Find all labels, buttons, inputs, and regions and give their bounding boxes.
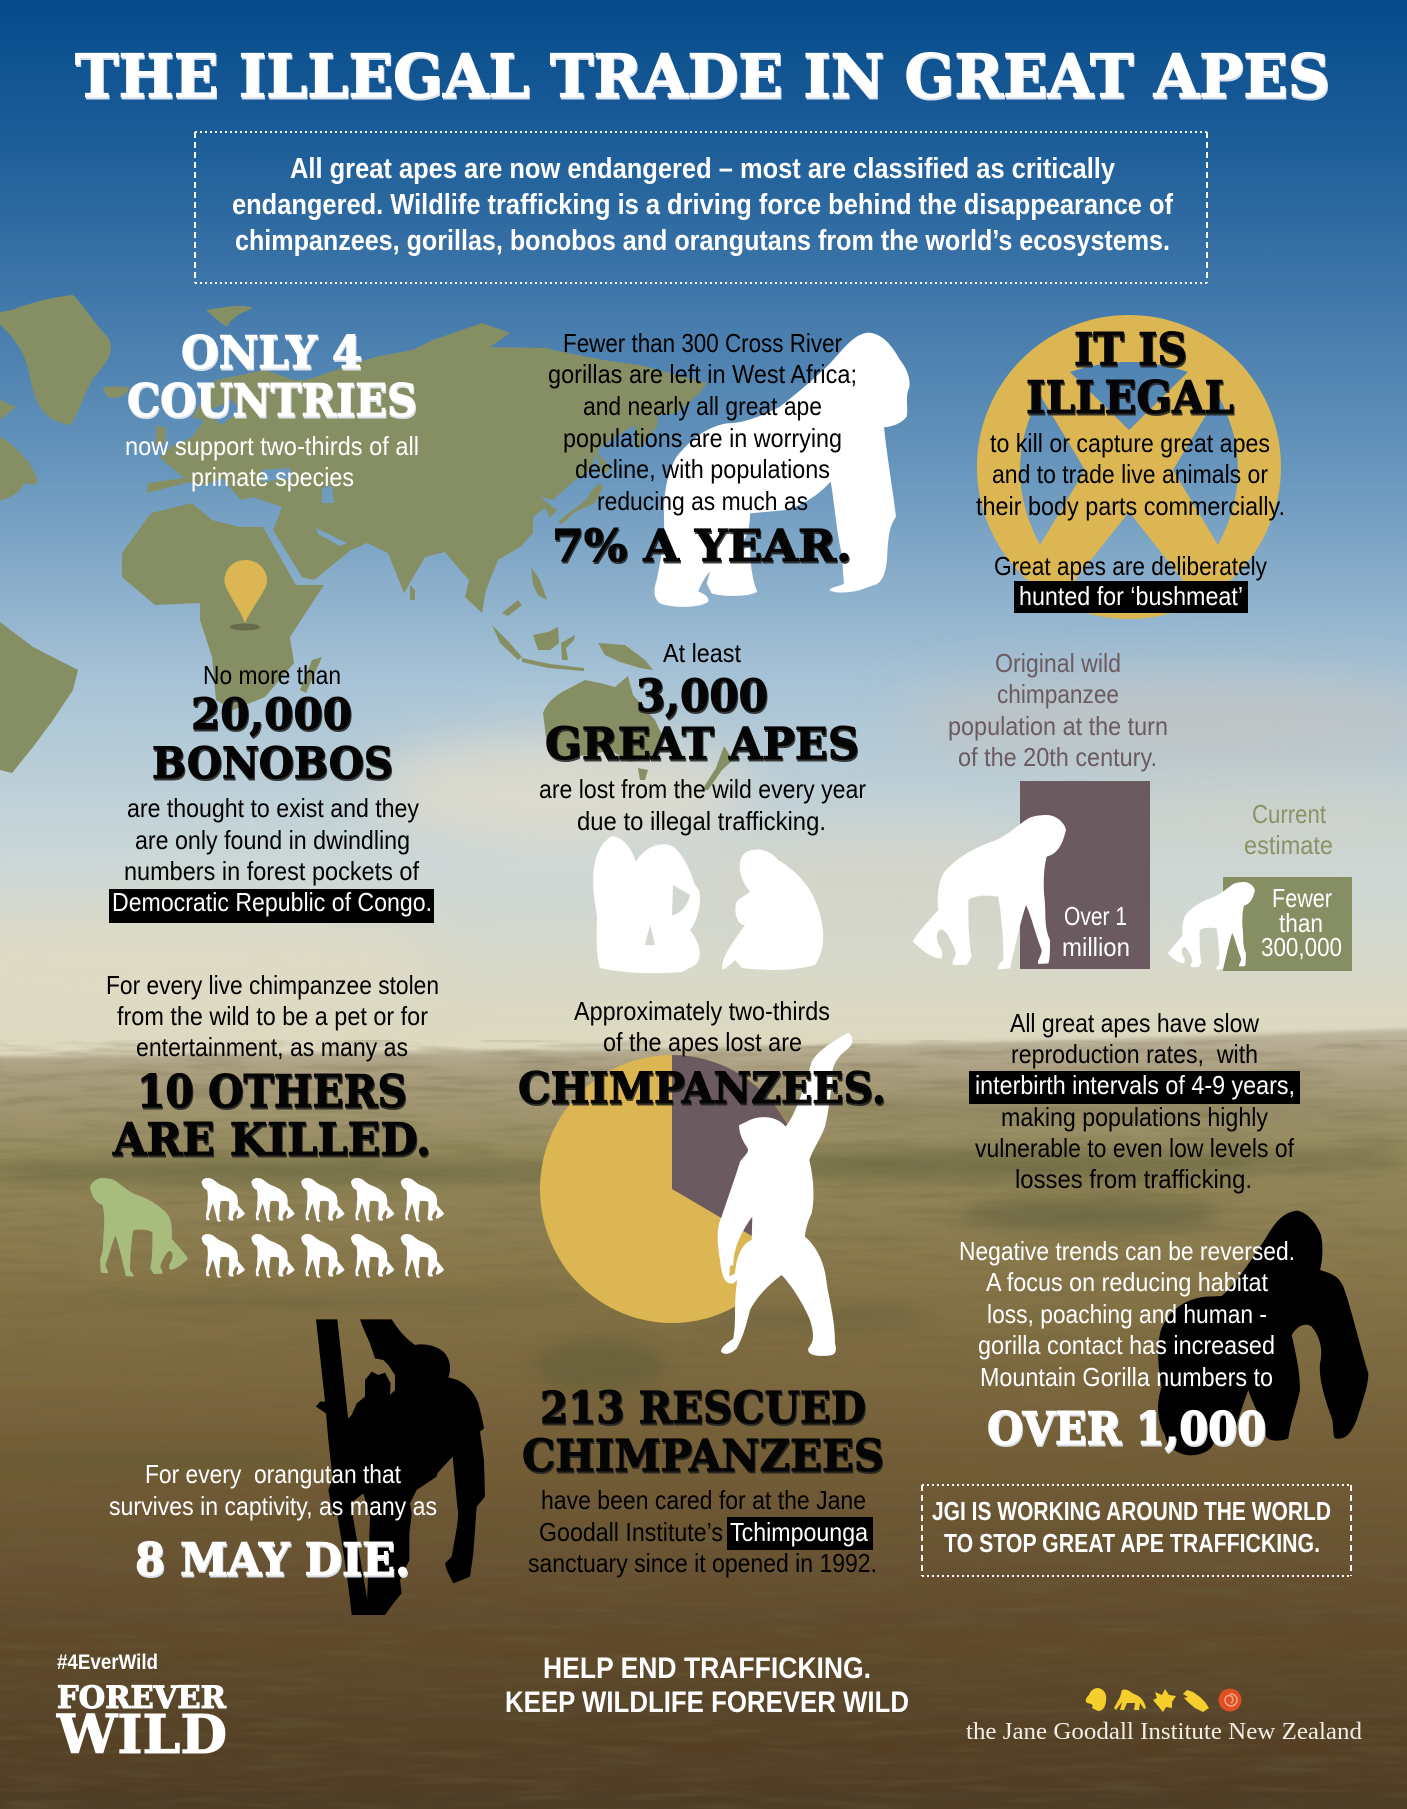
panel: it is illegal: ILLEGAL <box>1026 371 1234 424</box>
intro panel: chimpanzees, gorillas, bonobos and orangutans from the world’s ecosystems. <box>235 225 1170 257</box>
panel: two-thirds chimpanzees text: CHIMPANZEES. <box>518 1064 886 1114</box>
panel: 20,000 bonobos: 20,000 <box>191 690 352 740</box>
panel: 20,000 bonobos: BONOBOS <box>152 739 393 789</box>
panel: original chimpanzee population: Original wild <box>995 648 1121 678</box>
panel: it is illegal: IT IS <box>1074 323 1187 376</box>
panel: 213 rescued chimpanzees: have been cared for at the Jane <box>541 1485 866 1515</box>
panel: slow reproduction: making populations highly <box>1001 1102 1268 1132</box>
panel: original chimpanzee population: Over 1 <box>1064 901 1127 931</box>
panel: current chimpanzee estimate: than <box>1279 908 1323 938</box>
title: THE ILLEGAL TRADE IN GREAT APES <box>75 42 1330 112</box>
panel: slow reproduction: vulnerable to even low levels of <box>975 1133 1295 1163</box>
panel: 213 rescued chimpanzees <box>522 1383 884 1578</box>
panel: 10 others are killed: from the wild to be a pet or for <box>117 1001 428 1031</box>
panel: 8 may die: survives in captivity, as many as <box>109 1491 437 1521</box>
panel: 7% a year: reducing as much as <box>597 486 808 516</box>
icon: white chimpanzee with raised arm <box>718 1033 852 1356</box>
panel: slow reproduction: All great apes have slow <box>1010 1008 1259 1038</box>
panel: original chimpanzee population: of the 20th century. <box>958 742 1157 772</box>
panel: 3,000 great apes: are lost from the wild every year <box>539 774 866 804</box>
icon: map pin over Congo <box>224 560 267 630</box>
panel: over 1,000 mountain gorillas: gorilla contact has increased <box>978 1330 1275 1360</box>
intro panel: All great apes are now endangered – most are classified as critically <box>290 153 1115 185</box>
panel: slow reproduction: interbirth intervals of 4-9 years, <box>975 1070 1295 1100</box>
pie chart: two-thirds chimpanzees <box>540 1055 804 1323</box>
panel: 20,000 bonobos: No more than <box>203 660 341 690</box>
panel: 7% a year: and nearly all great ape <box>583 391 822 421</box>
panel: 20,000 bonobos: are only found in dwindling <box>135 825 410 855</box>
footer: Jane Goodall Institute logo: the Jane Goodall Institute New Zealand <box>966 1719 1362 1745</box>
icon: sitting apes <box>593 836 823 973</box>
icon: one green chimpanzee stolen <box>90 1178 188 1277</box>
panel: it is illegal: to kill or capture great apes <box>990 428 1270 458</box>
panel: slow reproduction: losses from trafficking. <box>1015 1164 1252 1194</box>
call to action: KEEP WILDLIFE FOREVER WILD <box>505 1686 909 1719</box>
panel: 213 rescued chimpanzees: sanctuary since it opened in 1992. <box>528 1548 877 1578</box>
panel: 3,000 great apes: At least <box>663 638 742 668</box>
panel: slow reproduction: reproduction rates, with <box>1011 1039 1258 1069</box>
panel: 3,000 great apes: GREAT APES <box>545 719 859 770</box>
panel: 8 may die: For every orangutan that <box>145 1459 402 1489</box>
panel: it is illegal: and to trade live animals or <box>992 459 1268 489</box>
panel: original chimpanzee population: chimpanzee <box>997 679 1119 709</box>
panel: 10 others are killed: For every live chimpanzee stolen <box>106 970 439 1000</box>
panel: only 4 countries: now support two-thirds of all <box>125 431 419 461</box>
panel: only 4 countries <box>125 326 419 492</box>
panel: only 4 countries: ONLY 4 <box>181 326 362 379</box>
icon: black mountain gorilla <box>1158 1211 1368 1455</box>
panel: two-thirds chimpanzees text: Approximately two-thirds <box>574 996 830 1026</box>
panel: it is illegal: Great apes are deliberately <box>994 551 1267 581</box>
panel: 20,000 bonobos: numbers in forest pockets of <box>124 856 420 886</box>
panel: original chimpanzee population <box>913 648 1168 969</box>
call to action: HELP END TRAFFICKING. <box>543 1652 871 1685</box>
panel: original chimpanzee population: population at the turn <box>948 711 1168 741</box>
panel: it is illegal: hunted for ‘bushmeat’ <box>1019 581 1243 611</box>
panel: over 1,000 mountain gorillas <box>959 1236 1295 1455</box>
panel: original chimpanzee population: million <box>1062 932 1130 962</box>
panel: over 1,000 mountain gorillas: loss, poaching and human - <box>987 1299 1267 1329</box>
callout: JGI working around the world: TO STOP GREAT APE TRAFFICKING. <box>944 1528 1320 1558</box>
panel: current chimpanzee estimate: Current <box>1252 799 1327 829</box>
panel: current chimpanzee estimate: estimate <box>1244 830 1333 860</box>
panel: 8 may die: 8 MAY DIE. <box>135 1533 410 1586</box>
icon: white gorilla <box>654 333 910 607</box>
world map <box>0 295 733 790</box>
panel: 7% a year: Fewer than 300 Cross River <box>563 328 842 358</box>
panel: 10 others are killed: ARE KILLED. <box>112 1113 431 1166</box>
panel: 7% a year: 7% A YEAR. <box>552 521 852 572</box>
panel: over 1,000 mountain gorillas: A focus on reducing habitat <box>986 1267 1269 1297</box>
panel: 213 rescued chimpanzees: Goodall Institute’s <box>539 1517 723 1547</box>
panel: over 1,000 mountain gorillas: Negative trends can be reversed. <box>959 1236 1295 1266</box>
panel: 7% a year: decline, with populations <box>575 454 830 484</box>
panel: 7% a year: populations are in worrying <box>563 423 842 453</box>
panel: current chimpanzee estimate: 300,000 <box>1261 932 1342 962</box>
intro panel <box>195 132 1207 283</box>
panel: 20,000 bonobos: are thought to exist and they <box>127 793 419 823</box>
panel: current chimpanzee estimate <box>1168 799 1352 971</box>
panel: two-thirds chimpanzees text <box>518 996 886 1114</box>
footer: Forever Wild logo <box>56 1651 227 1766</box>
panel: 10 others are killed <box>106 970 439 1166</box>
panel: 7% a year <box>548 328 857 572</box>
call to action <box>505 1652 909 1719</box>
panel: 3,000 great apes: due to illegal trafficking. <box>577 806 826 836</box>
panel: over 1,000 mountain gorillas: Mountain Gorilla numbers to <box>980 1362 1273 1392</box>
footer: Forever Wild logo: #4EverWild <box>57 1651 158 1674</box>
panel: slow reproduction <box>969 1008 1300 1194</box>
panel: 213 rescued chimpanzees: 213 RESCUED <box>540 1383 866 1434</box>
panel: only 4 countries: primate species <box>191 462 354 492</box>
panel: it is illegal: their body parts commercially. <box>976 491 1285 521</box>
panel: it is illegal <box>976 315 1285 619</box>
panel: 20,000 bonobos: Democratic Republic of Congo. <box>112 887 432 917</box>
icon group: ten white chimpanzees killed <box>202 1178 444 1278</box>
icon: orangutan on branch <box>316 1319 485 1615</box>
panel: two-thirds chimpanzees text: of the apes lost are <box>603 1027 802 1057</box>
panel: 7% a year: gorillas are left in West Africa; <box>548 359 857 389</box>
panel: 213 rescued chimpanzees: CHIMPANZEES <box>522 1431 884 1482</box>
panel: current chimpanzee estimate: Fewer <box>1272 883 1332 913</box>
intro panel: endangered. Wildlife trafficking is a driving force behind the disappearance of <box>232 189 1173 221</box>
panel: 3,000 great apes <box>539 638 866 836</box>
footer: Jane Goodall Institute logo <box>966 1688 1362 1745</box>
panel: 3,000 great apes: 3,000 <box>636 671 768 722</box>
panel: 10 others are killed: entertainment, as many as <box>136 1032 408 1062</box>
panel: over 1,000 mountain gorillas: OVER 1,000 <box>987 1402 1266 1455</box>
footer: Forever Wild logo: FOREVER <box>57 1680 226 1716</box>
panel: 20,000 bonobos <box>109 660 434 923</box>
panel: only 4 countries: COUNTRIES <box>127 374 417 427</box>
panel: 8 may die <box>109 1459 437 1586</box>
callout: JGI working around the world <box>922 1485 1351 1576</box>
panel: 10 others are killed: 10 OTHERS <box>137 1065 407 1118</box>
panel: 213 rescued chimpanzees: Tchimpounga <box>730 1517 868 1547</box>
footer: Forever Wild logo: WILD <box>56 1704 227 1766</box>
